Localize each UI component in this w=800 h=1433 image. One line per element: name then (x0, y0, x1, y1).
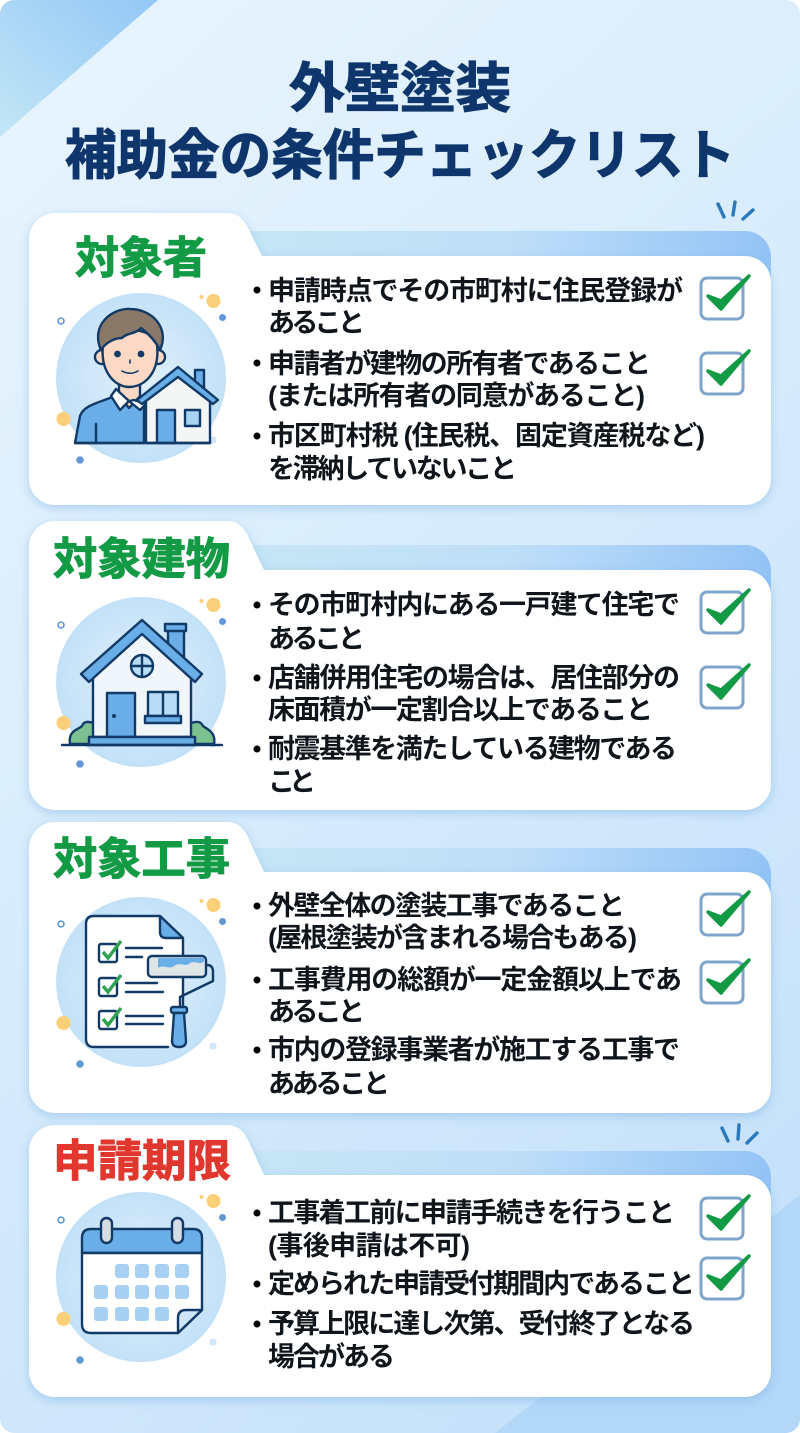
checklist text: (または所有者の同意があること) (268, 380, 645, 411)
checklist text: (屋根塗装が含まれる場合もある) (268, 922, 637, 953)
checklist text: 市内の登録事業者が施工する工事で (268, 1034, 680, 1065)
folder back bar (240, 231, 771, 300)
checklist text: 申請時点でその市町村に住民登録が (268, 275, 683, 306)
panel: 申請期限 (29, 1125, 771, 1397)
checklist text: 定められた申請受付期間内であること (268, 1269, 695, 1299)
sparkle accent (718, 202, 753, 219)
checklist text: 外壁全体の塗装工事であること (268, 891, 625, 921)
checklist text: 店舗併用住宅の場合は、居住部分の (268, 663, 680, 693)
checklist text: 市区町村税 (住民税、固定資産税など) (268, 421, 705, 451)
icon: checkbox (701, 276, 749, 319)
icon: person with house (56, 293, 226, 464)
checklist text: (事後申請は不可) (268, 1231, 470, 1261)
checklist text: あること (268, 308, 365, 338)
icon: checkbox (701, 590, 749, 633)
icon: checkbox (701, 1196, 749, 1239)
checklist text: その市町村内にある一戸建て住宅で (268, 590, 680, 620)
checklist text: 場合がある (268, 1341, 395, 1372)
checklist text: 耐震基準を満たしている建物である (268, 734, 677, 764)
sparkle accent (722, 1125, 757, 1143)
icon: house (56, 597, 226, 768)
card body (29, 521, 771, 810)
checklist text (254, 891, 682, 1099)
card body (29, 822, 771, 1113)
heading: 申請期限 (53, 1137, 231, 1186)
folder back bar (240, 848, 771, 910)
panel: 対象建物 (29, 521, 771, 810)
folder back bar (240, 545, 771, 610)
checklist text: 申請者が建物の所有者であること (268, 348, 651, 379)
icon: checkbox (701, 665, 749, 708)
icon: calendar (56, 1192, 226, 1364)
panel: 対象工事 (29, 822, 771, 1113)
checklist text: あること (268, 624, 365, 654)
panel: 対象者 (29, 202, 771, 505)
checklist text: 工事着工前に申請手続きを行うこと (268, 1198, 675, 1228)
icon: checklist and paint roller (56, 897, 226, 1068)
card body (29, 1125, 771, 1397)
icon: checkbox (701, 1256, 749, 1299)
checklist text (254, 590, 680, 797)
icon: checkbox (701, 892, 749, 935)
folder back bar (240, 1151, 771, 1210)
heading: 対象建物 (53, 535, 230, 584)
title (65, 59, 735, 186)
title: 補助金の条件チェックリスト (65, 126, 735, 186)
heading: 対象者 (75, 234, 207, 283)
title: 外壁塗装 (289, 59, 511, 119)
checklist text (254, 1198, 695, 1372)
checklist text: ああること (268, 1069, 390, 1099)
checklist text (254, 275, 705, 484)
heading: 対象工事 (53, 835, 230, 884)
checklist text: こと (268, 767, 316, 797)
checklist text: あること (268, 997, 365, 1027)
checklist text: を滞納していないこと (268, 454, 517, 484)
checklist text: 工事費用の総額が一定金額以上であ (268, 964, 682, 995)
checklist text: 床面積が一定割合以上であること (268, 694, 653, 725)
icon: checkbox (701, 351, 749, 394)
icon: checkbox (701, 960, 749, 1003)
card body (29, 213, 771, 505)
checklist text: 予算上限に達し次第、受付終了となる (268, 1309, 695, 1339)
